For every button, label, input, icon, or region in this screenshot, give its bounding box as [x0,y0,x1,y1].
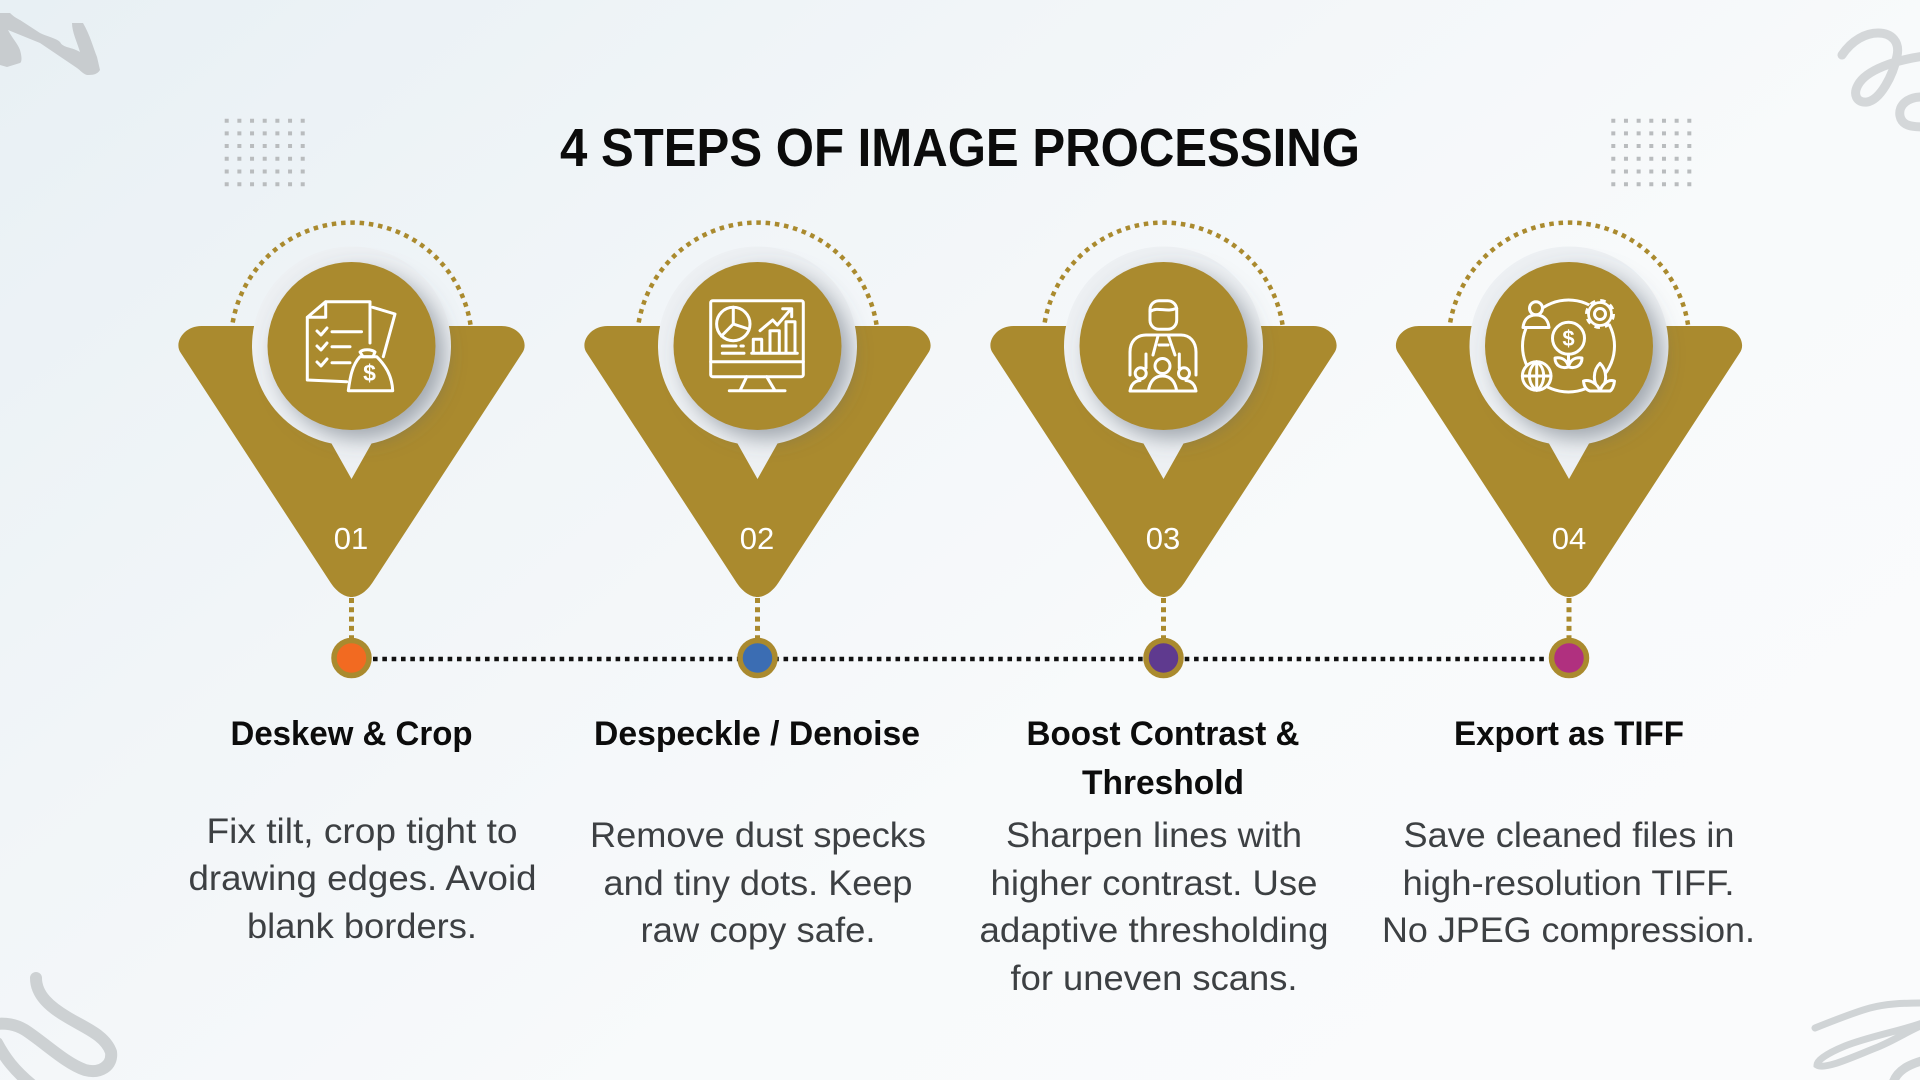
text block: step 1 [188,715,536,946]
dot grid: right [1611,121,1694,184]
text block: step 2 [590,715,926,950]
icon: sustainable finance cycle: $ [1562,326,1575,351]
heading: Export as TIFF: Export as TIFF [1454,715,1684,753]
description: step 4: Save cleaned files in [1404,816,1734,855]
description: step 3: higher contrast. Use [990,864,1318,903]
title: 4 STEPS OF IMAGE PROCESSING [560,118,1360,178]
scribble: bottom left [0,978,111,1080]
description: step 1: drawing edges. Avoid [188,859,536,898]
description: step 1: Fix tilt, crop tight to [206,812,518,851]
dot grid: left [225,121,308,184]
description: step 4 [1382,816,1755,950]
scribble: top left [0,13,100,75]
icon: checklist and money bag [307,302,395,391]
scribble: bottom right [1815,1003,1920,1080]
icon: sustainable finance cycle [1522,300,1614,392]
description: step 3: adaptive thresholding [980,911,1328,950]
heading: Deskew and Crop: Deskew & Crop [230,715,472,753]
heading: Boost Contrast and Threshold [1026,715,1300,802]
icon: monitor with charts [711,301,803,391]
step number 03: 03 [1146,521,1180,556]
icon: checklist and money bag: $ [363,360,376,386]
description: step 2 [590,816,926,950]
description: step 2: and tiny dots. Keep [604,864,912,903]
description: step 1 [188,812,536,946]
scribble: top right [1842,33,1920,127]
step 4 graphic [1396,223,1742,676]
step 1 graphic [178,223,525,676]
heading: Boost Contrast and Threshold: Boost Contrast & [1026,715,1300,753]
text block: step 3 [980,715,1328,998]
description: step 2: Remove dust specks [590,816,926,855]
step number 04: 04 [1552,521,1586,556]
description: step 3: for uneven scans. [1010,959,1298,998]
step 2 graphic [584,223,931,676]
step 3 graphic [990,223,1337,676]
step number 01: 01 [334,521,368,556]
heading: Despeckle and Denoise: Despeckle / Denoise [594,715,920,753]
heading: Boost Contrast and Threshold: Threshold [1082,764,1244,802]
description: step 4: high-resolution TIFF. [1402,864,1734,903]
description: step 3: Sharpen lines with [1006,816,1302,855]
text block: step 4 [1382,715,1755,950]
description: step 1: blank borders. [247,907,477,946]
icon: manager and team [1130,301,1196,391]
description: step 2: raw copy safe. [640,911,876,950]
description: step 3 [980,816,1328,998]
step number 02: 02 [740,521,774,556]
timeline dotted line [373,657,1548,661]
description: step 4: No JPEG compression. [1382,911,1755,950]
